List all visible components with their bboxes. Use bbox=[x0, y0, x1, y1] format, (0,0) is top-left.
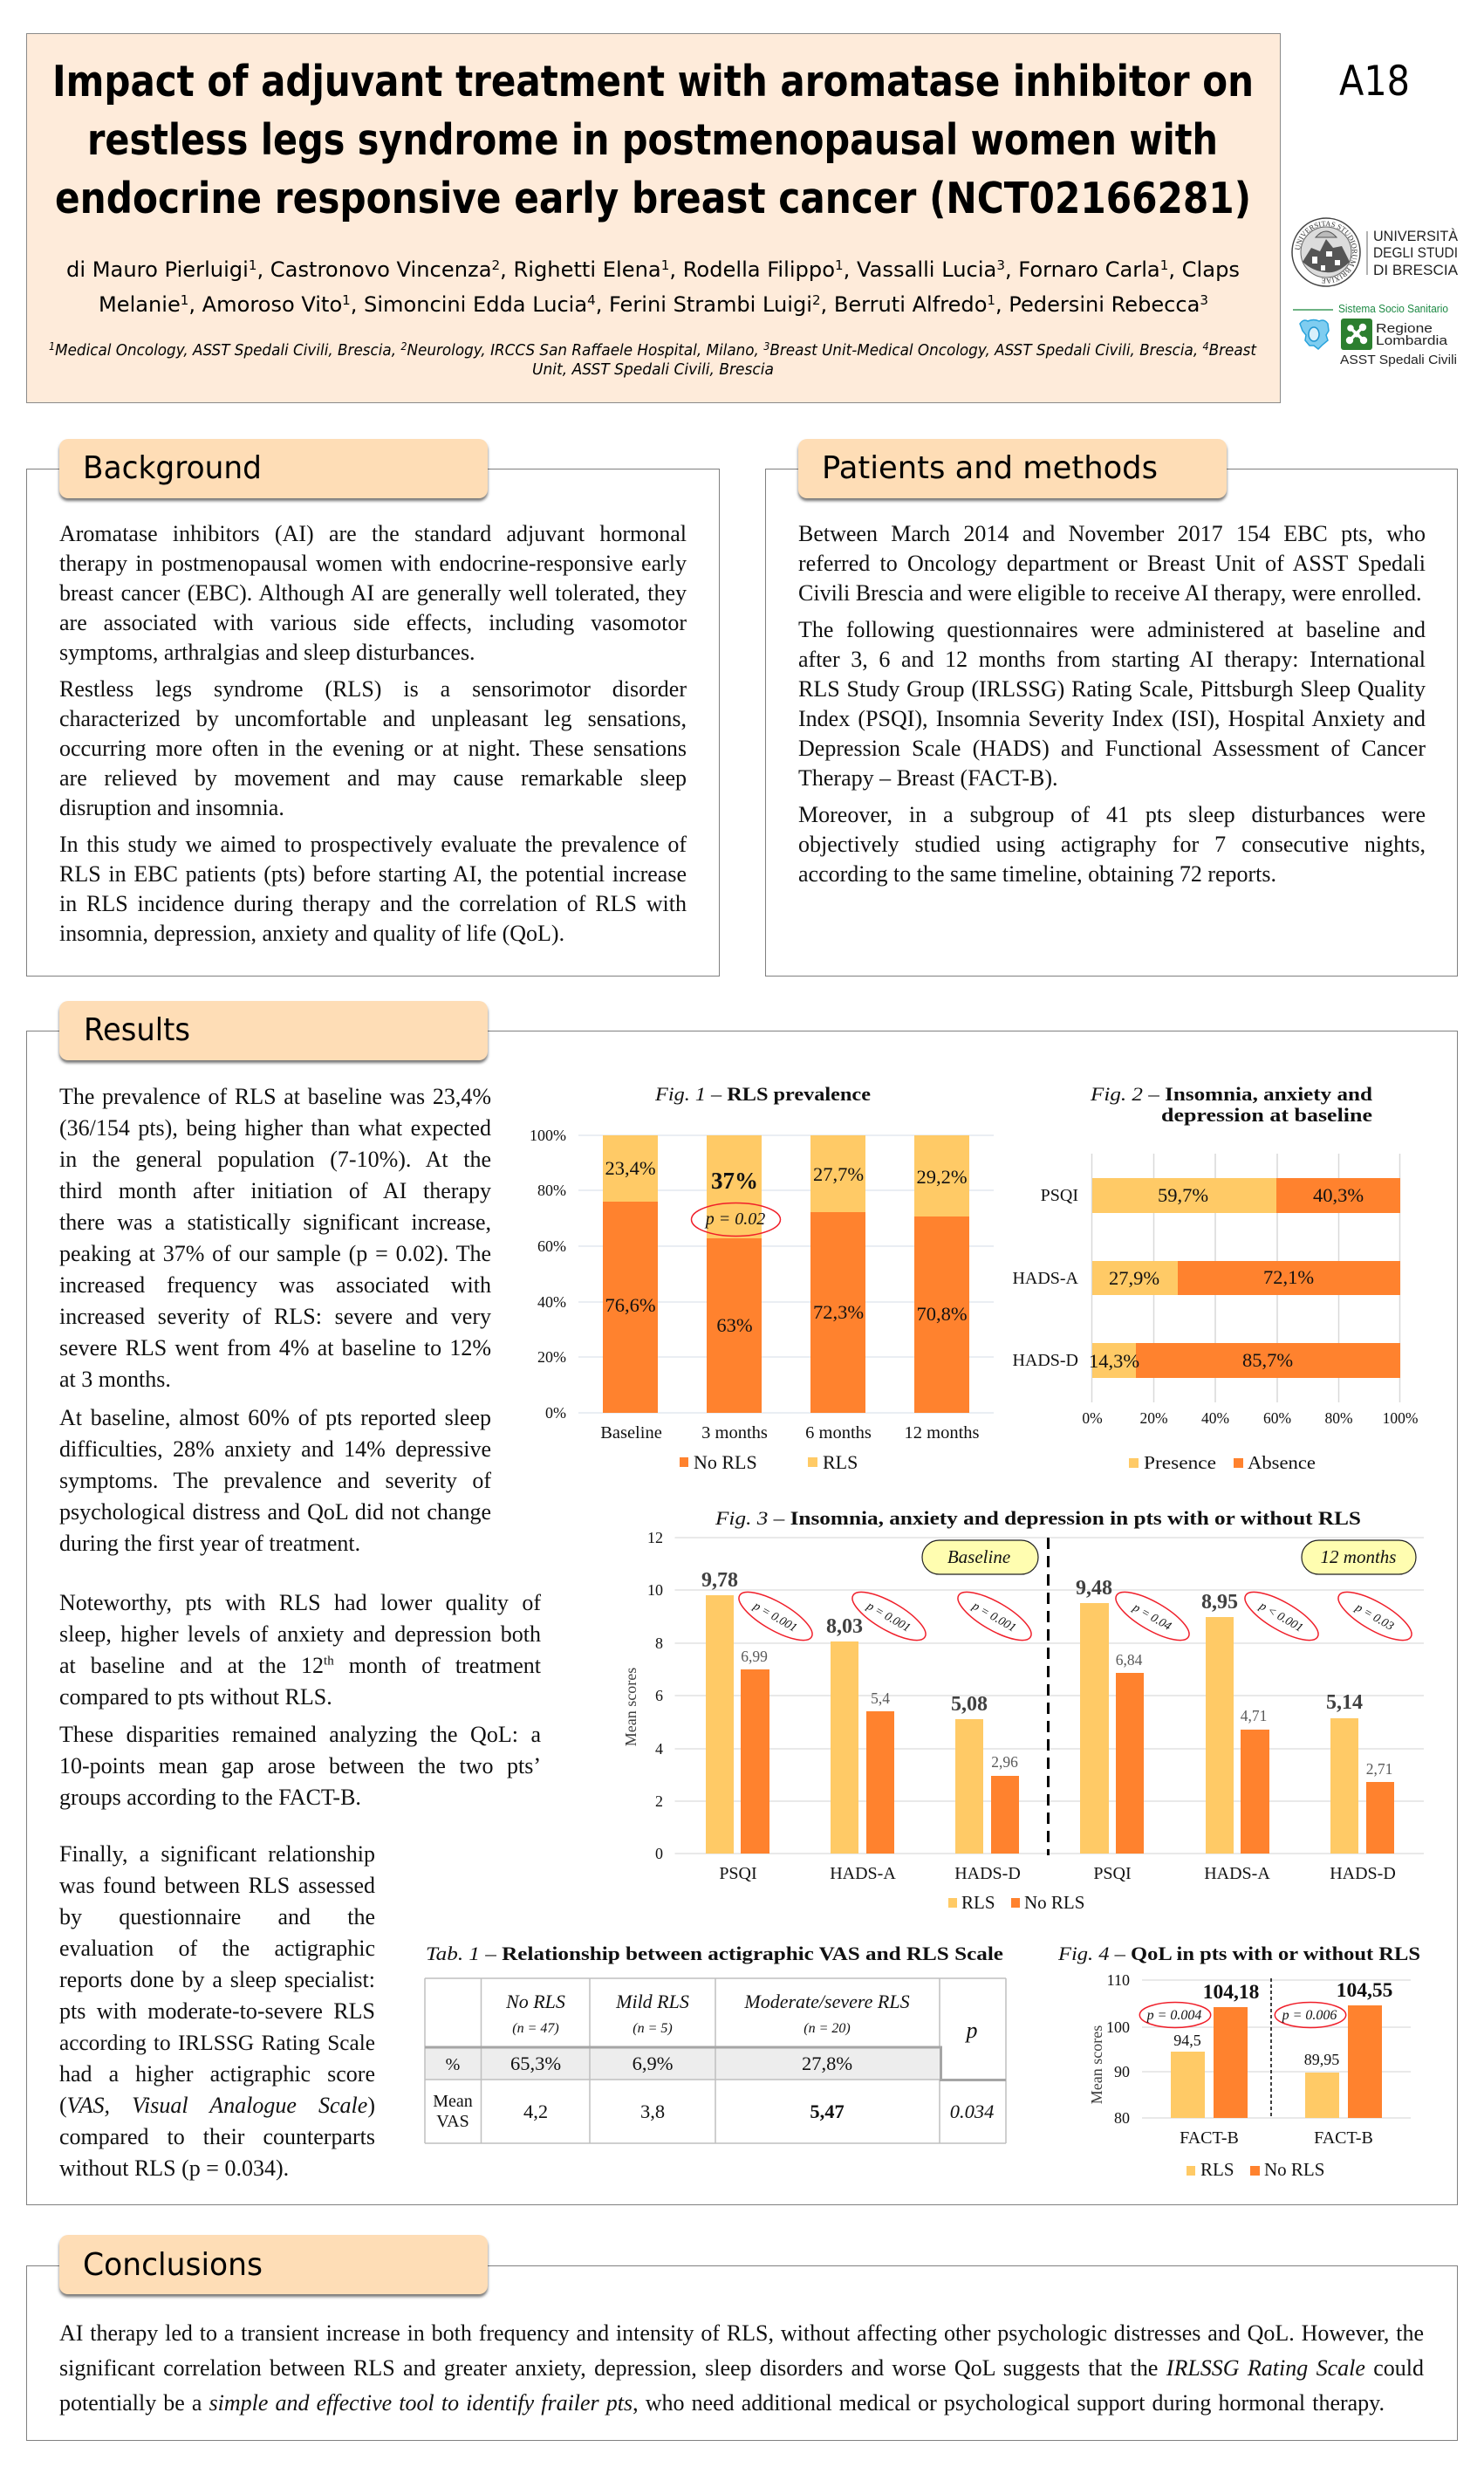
text: results paragraph 3: Noteworthy, pts with RLS had lower quality of bbox=[59, 1590, 541, 1615]
y axis labels: 8 bbox=[655, 1634, 663, 1652]
chart title: depression at baseline bbox=[1161, 1104, 1372, 1126]
authors: , Amoroso Vito bbox=[188, 291, 342, 316]
logo: Regione Lombardia ASST Spedali Civili: Sistema Socio Sanitario bbox=[1338, 302, 1448, 315]
university name bbox=[1373, 228, 1459, 278]
text: results paragraph 5: was found between RLS assessed bbox=[59, 1873, 375, 1898]
authors: 1 bbox=[248, 257, 256, 272]
text: results paragraph 2: psychological distress and QoL did not change bbox=[59, 1499, 491, 1525]
data labels: 23,4% bbox=[605, 1157, 656, 1179]
text: background paragraph 3: In this study we aimed to prospectively evaluate the prevalence of bbox=[59, 832, 687, 857]
y axis labels: 80% bbox=[537, 1182, 566, 1199]
text: results paragraph 4: These disparities remained analyzing the QoL: a bbox=[59, 1722, 541, 1747]
text: results paragraph 1 bbox=[59, 1084, 491, 1392]
text: background paragraph 3: in RLS incidence during therapy and the correlation of RLS with bbox=[59, 891, 687, 916]
row: mean VAS: 4,2 bbox=[523, 2101, 548, 2122]
row: percent: 65,3% bbox=[510, 2053, 561, 2074]
text: methods paragraph 1 bbox=[798, 521, 1426, 606]
authors bbox=[66, 257, 1239, 316]
text: results paragraph 2: difficulties, 28% anxiety and 14% depressive bbox=[59, 1436, 491, 1462]
heading: results bbox=[59, 1001, 488, 1060]
legend: No RLS bbox=[1024, 1892, 1084, 1913]
bars bbox=[1171, 2005, 1382, 2118]
logo: Regione Lombardia ASST Spedali Civili: Lombardia bbox=[1376, 333, 1448, 348]
chart: Fig. 2 insomnia, anxiety and depression at baseline bbox=[1012, 1083, 1418, 1473]
row: percent: 6,9% bbox=[633, 2053, 673, 2074]
authors: 3 bbox=[1200, 291, 1207, 307]
authors: , Ferini Strambi Luigi bbox=[595, 291, 811, 316]
authors: 2 bbox=[811, 291, 820, 307]
data labels: 14,3% bbox=[1089, 1350, 1139, 1372]
text: results paragraph 1: severe RLS went from 4% at baseline to 12% bbox=[59, 1335, 491, 1360]
text: background paragraph 3: insomnia, depression, anxiety and quality of life (QoL). bbox=[59, 921, 564, 946]
text: background paragraph 2: are relieved by movement and may cause remarkable sleep bbox=[59, 765, 687, 791]
y axis title: Mean scores bbox=[1088, 2025, 1105, 2104]
panel: background bbox=[26, 439, 720, 977]
row: mean VAS: 3,8 bbox=[640, 2101, 665, 2122]
legend: RLS bbox=[823, 1451, 858, 1473]
category labels bbox=[600, 1423, 980, 1443]
text: results paragraph 5: by questionnaire and the bbox=[59, 1904, 375, 1929]
text: results paragraph 5: compared to their counterparts bbox=[59, 2124, 375, 2149]
category labels: Baseline bbox=[600, 1423, 662, 1443]
chart title: Fig. 1 – RLS prevalence bbox=[654, 1083, 871, 1105]
table header: (n = 5) bbox=[633, 2021, 673, 2036]
row: mean VAS: 0.034 bbox=[950, 2101, 994, 2122]
data labels: 76,6% bbox=[605, 1294, 656, 1316]
table title: Tab. 1 – Relationship between actigraphic VAS and RLS Scale bbox=[426, 1943, 1003, 1964]
data labels: RLS: 5,08 bbox=[951, 1693, 988, 1716]
logo: Università degli Studi di Brescia bbox=[1291, 217, 1459, 287]
affiliations: Unit, ASST Spedali Civili, Brescia bbox=[532, 360, 773, 379]
legend: RLS bbox=[1200, 2159, 1234, 2180]
authors: 1 bbox=[1159, 257, 1168, 272]
data labels: no RLS: 6,99 bbox=[741, 1648, 768, 1665]
text: methods paragraph 2: Therapy – Breast (FACT-B). bbox=[798, 765, 1058, 791]
data labels: 29,2% bbox=[916, 1166, 968, 1188]
data labels: 37% bbox=[711, 1168, 758, 1194]
authors: 1 bbox=[987, 291, 995, 307]
category labels: PSQI bbox=[1041, 1186, 1078, 1205]
category labels bbox=[719, 1864, 1396, 1883]
row: mean VAS bbox=[433, 2092, 994, 2131]
y axis labels: 4 bbox=[655, 1740, 663, 1758]
text: methods paragraph 1: Civili Brescia and were eligible to receive AI therapy, were enrolled. bbox=[798, 580, 1421, 606]
data labels: no RLS: 2,71 bbox=[1366, 1760, 1392, 1778]
chart title: Fig. 2 – Insomnia, anxiety and bbox=[1090, 1083, 1372, 1105]
authors: Melanie bbox=[98, 291, 180, 316]
x axis labels: 40% bbox=[1201, 1409, 1229, 1427]
text: results paragraph 1: The prevalence of RLS at baseline was 23,4% bbox=[59, 1084, 491, 1109]
data labels bbox=[1173, 1979, 1392, 2068]
heading: results: Results bbox=[84, 1012, 190, 1048]
y axis labels: 110 bbox=[1107, 1971, 1130, 1989]
authors: di Mauro Pierluigi bbox=[66, 257, 247, 281]
category labels: HADS-A bbox=[1012, 1269, 1079, 1288]
y axis labels: 6 bbox=[655, 1687, 663, 1704]
text: results paragraph 3: sleep, higher levels of anxiety and depression both bbox=[59, 1621, 541, 1647]
chart title: Fig. 3 – Insomnia, anxiety and depression in pts with or without RLS bbox=[715, 1507, 1361, 1529]
p value callouts bbox=[733, 1583, 1418, 1649]
university name: UNIVERSITÀ bbox=[1373, 228, 1459, 244]
university name: DI BRESCIA bbox=[1373, 262, 1459, 278]
row: percent: % bbox=[446, 2055, 460, 2074]
text: methods paragraph 3: Moreover, in a subgroup of 41 pts sleep disturbances were bbox=[798, 802, 1426, 827]
data labels bbox=[605, 1157, 968, 1336]
category labels: HADS-D bbox=[954, 1864, 1021, 1883]
p value callouts: p = 0.001 bbox=[969, 1600, 1018, 1635]
text: results paragraph 5: reports done by a sleep specialist: bbox=[59, 1967, 375, 1992]
table header: (n = 20) bbox=[804, 2021, 851, 2036]
text: results paragraph 4 bbox=[59, 1722, 541, 1810]
y axis labels: 12 bbox=[647, 1529, 663, 1546]
text: conclusions: AI therapy led to a transient increase in both frequency and intensity of RLS, without affecting other psychologic distresses and QoL. However, the bbox=[59, 2320, 1424, 2346]
category labels: FACT-B bbox=[1180, 2128, 1239, 2148]
bars: baseline bbox=[706, 1595, 1019, 1854]
header banner bbox=[26, 33, 1281, 403]
text: results paragraph 3: compared to pts without RLS. bbox=[59, 1684, 332, 1710]
y axis labels: 0 bbox=[655, 1845, 663, 1862]
text: background paragraph 1: are associated with various side effects, including vasomotor bbox=[59, 610, 687, 635]
text: results paragraph 5: according to IRLSSG Rating Scale bbox=[59, 2031, 375, 2055]
authors: , Rodella Filippo bbox=[669, 257, 835, 281]
text: results paragraph 1: (36/154 pts), being higher than what expected bbox=[59, 1115, 491, 1141]
table header: Moderate/severe RLS bbox=[743, 1991, 910, 2012]
text: results paragraph 4: groups according to the FACT-B. bbox=[59, 1785, 361, 1810]
category labels: HADS-D bbox=[1012, 1351, 1078, 1370]
authors: , Claps bbox=[1168, 257, 1239, 281]
p value callouts: p = 0.006 bbox=[1282, 2008, 1337, 2023]
heading: background: Background bbox=[83, 450, 262, 486]
affiliations: 1 bbox=[49, 340, 55, 353]
row: mean VAS: 5,47 bbox=[810, 2101, 845, 2122]
text: results paragraph 5: evaluation of the actigraphic bbox=[59, 1936, 375, 1961]
category labels bbox=[1180, 2128, 1373, 2148]
data labels: 27,7% bbox=[813, 1163, 864, 1185]
data labels: 85,7% bbox=[1242, 1349, 1293, 1371]
chart: Fig. 4 QoL in pts with or without RLS bbox=[1057, 1943, 1420, 2180]
text: results paragraph 2: At baseline, almost 60% of pts reported sleep bbox=[59, 1405, 491, 1430]
legend: No RLS bbox=[1264, 2159, 1324, 2180]
data labels: 94,5 bbox=[1173, 2032, 1201, 2049]
text: methods paragraph 3: objectively studied using actigraphy for 7 consecutive nights, bbox=[798, 832, 1426, 857]
text: conclusions: significant correlation between RLS and greater anxiety, depression, sleep disorders and worse QoL suggests that the IRLSSG Rating Scale could bbox=[59, 2355, 1424, 2381]
category labels: HADS-A bbox=[1204, 1864, 1270, 1883]
y axis labels bbox=[530, 1127, 566, 1422]
title: Impact of adjuvant treatment with aromatase inhibitor on bbox=[52, 56, 1253, 106]
data labels: 104,55 bbox=[1337, 1979, 1392, 2002]
affiliations: 4 bbox=[1202, 340, 1208, 353]
data labels: 104,18 bbox=[1203, 1981, 1259, 2004]
text: methods paragraph 3 bbox=[798, 802, 1426, 887]
text: results paragraph 5: Finally, a significant relationship bbox=[59, 1841, 375, 1867]
data labels: RLS: 9,48 bbox=[1076, 1577, 1112, 1600]
affiliations: Neurology, IRCCS San Raffaele Hospital, Milano, bbox=[407, 340, 763, 360]
row: percent bbox=[446, 2053, 852, 2074]
text: results paragraph 2 bbox=[59, 1405, 492, 1556]
table header: Mild RLS bbox=[615, 1991, 689, 2012]
data labels: no RLS bbox=[741, 1648, 1392, 1778]
row: percent: 27,8% bbox=[802, 2053, 852, 2074]
text: results paragraph 1: third month after initiation of AI therapy bbox=[59, 1178, 491, 1203]
x axis labels: 20% bbox=[1139, 1409, 1168, 1427]
authors: 1 bbox=[180, 291, 188, 307]
y axis labels: 20% bbox=[537, 1348, 566, 1366]
text: background paragraph 3 bbox=[59, 832, 687, 946]
authors: , Vassalli Lucia bbox=[843, 257, 996, 281]
y axis labels: 100% bbox=[530, 1127, 566, 1144]
poster code A18: A18 bbox=[1339, 58, 1410, 106]
category labels: HADS-A bbox=[830, 1864, 896, 1883]
legend bbox=[680, 1451, 858, 1473]
text: background paragraph 1: Aromatase inhibitors (AI) are the standard adjuvant hormonal bbox=[59, 521, 687, 546]
affiliations: Medical Oncology, ASST Spedali Civili, Brescia, bbox=[55, 340, 400, 360]
data labels: 70,8% bbox=[916, 1303, 968, 1325]
heading: patients and methods bbox=[798, 439, 1227, 498]
text: background paragraph 2: disruption and insomnia. bbox=[59, 795, 284, 820]
x axis labels: 60% bbox=[1263, 1409, 1291, 1427]
x axis labels bbox=[1082, 1409, 1418, 1427]
data labels: 40,3% bbox=[1313, 1184, 1364, 1206]
data labels: no RLS: 6,84 bbox=[1116, 1651, 1143, 1669]
text: methods paragraph 2: after 3, 6 and 12 months from starting AI therapy: International bbox=[798, 647, 1426, 672]
p value callouts: p = 0.004 bbox=[1146, 2008, 1201, 2023]
logo: Regione Lombardia ASST Spedali Civili: Regione bbox=[1376, 321, 1433, 336]
data labels: RLS: 8,03 bbox=[826, 1615, 863, 1638]
text: results paragraph 5: pts with moderate-to-severe RLS bbox=[59, 1998, 375, 2024]
data labels: 72,1% bbox=[1263, 1266, 1314, 1288]
pill: 12 months bbox=[1302, 1540, 1416, 1574]
p value callouts: p < 0.001 bbox=[1256, 1600, 1305, 1635]
text: results paragraph 3 bbox=[59, 1590, 541, 1710]
data labels: 27,9% bbox=[1109, 1267, 1159, 1289]
text: results paragraph 4: 10-points mean gap arose between the two pts’ bbox=[59, 1753, 541, 1778]
data labels: no RLS: 2,96 bbox=[991, 1753, 1018, 1771]
category labels: HADS-D bbox=[1330, 1864, 1396, 1883]
data labels: RLS: 5,14 bbox=[1326, 1691, 1363, 1714]
y axis title: Mean scores bbox=[622, 1668, 639, 1746]
text: methods paragraph 3: according to the same timeline, obtaining 72 reports. bbox=[798, 861, 1276, 887]
text: methods paragraph 2: RLS Study Group (IRLSSG) Rating Scale, Pittsburgh Sleep Quality bbox=[798, 676, 1426, 702]
text: results paragraph 1: increased severity of RLS: severe and very bbox=[59, 1304, 491, 1329]
row: mean VAS: VAS bbox=[436, 2112, 469, 2131]
y axis labels: 80 bbox=[1114, 2109, 1130, 2127]
category labels: PSQI bbox=[1093, 1864, 1132, 1883]
heading: patients and methods: Patients and methods bbox=[822, 450, 1158, 486]
authors: 1 bbox=[835, 257, 843, 272]
heading: conclusions bbox=[59, 2235, 488, 2294]
affiliations: 2 bbox=[400, 340, 407, 353]
text: results paragraph 1: at 3 months. bbox=[59, 1367, 171, 1392]
p value callouts: p = 0.001 bbox=[864, 1600, 913, 1635]
text: results paragraph 5 bbox=[59, 1841, 375, 2181]
legend: Presence bbox=[1144, 1452, 1216, 1473]
chart: Fig. 3 insomnia, anxiety and depression in pts with or without RLS bbox=[622, 1507, 1424, 1913]
data labels: 59,7% bbox=[1158, 1184, 1208, 1206]
pill: baseline bbox=[922, 1540, 1038, 1574]
authors: 1 bbox=[660, 257, 669, 272]
text: background paragraph 2: characterized by uncomfortable and unpleasant leg sensations, bbox=[59, 706, 687, 731]
text: background paragraph 3: RLS in EBC patients (pts) before starting AI, the potential increase bbox=[59, 861, 687, 887]
text: results paragraph 1: in the general population (7-10%). At the bbox=[59, 1147, 491, 1172]
pill: 12 months: 12 months bbox=[1321, 1546, 1396, 1567]
text: background paragraph 1: breast cancer (EBC). Although AI are generally well tolerated, they bbox=[59, 580, 687, 606]
title: endocrine responsive early breast cancer (NCT02166281) bbox=[54, 173, 1251, 223]
table header: (n = 47) bbox=[512, 2021, 559, 2036]
authors: , Castronovo Vincenza bbox=[256, 257, 491, 281]
data labels: no RLS: 4,71 bbox=[1241, 1707, 1267, 1724]
data labels bbox=[1089, 1184, 1364, 1372]
chart title: Fig. 4 – QoL in pts with or without RLS bbox=[1057, 1943, 1420, 1964]
icon: university seal: UNIVERSITAS STUDIORUM BRIXIAE bbox=[1295, 221, 1357, 284]
text: results paragraph 5: (VAS, Visual Analogue Scale) bbox=[59, 2093, 375, 2118]
category labels: PSQI bbox=[719, 1864, 757, 1883]
legend: RLS bbox=[961, 1892, 995, 1913]
data labels: 72,3% bbox=[813, 1301, 864, 1323]
table header bbox=[505, 1991, 977, 2043]
bars: 12 months bbox=[1080, 1603, 1394, 1854]
text: conclusions bbox=[59, 2320, 1424, 2416]
y axis labels: 90 bbox=[1114, 2063, 1130, 2080]
category labels bbox=[1012, 1186, 1079, 1370]
title bbox=[52, 56, 1253, 223]
legend bbox=[948, 1892, 1084, 1913]
affiliations: 3 bbox=[763, 340, 769, 353]
p value callouts: p = 0.04 bbox=[1130, 1600, 1173, 1634]
table header: No RLS bbox=[505, 1991, 565, 2012]
text: methods paragraph 2: The following questionnaires were administered at baseline and bbox=[798, 617, 1426, 642]
text: methods paragraph 2 bbox=[798, 617, 1426, 791]
heading: background bbox=[59, 439, 488, 498]
data labels: RLS: 8,95 bbox=[1201, 1591, 1238, 1614]
legend bbox=[1129, 1452, 1316, 1473]
text: background paragraph 2: Restless legs syndrome (RLS) is a sensorimotor disorder bbox=[59, 676, 687, 702]
table: Tab. 1 relationship between actigraphic VAS and RLS Scale bbox=[424, 1943, 1007, 2144]
category labels: 6 months bbox=[805, 1423, 872, 1443]
heading: conclusions: Conclusions bbox=[83, 2247, 263, 2283]
text: methods paragraph 2: Index (PSQI), Insomnia Severity Index (ISI), Hospital Anxiety and bbox=[798, 706, 1426, 731]
text: conclusions: potentially be a simple and effective tool to identify frailer pts, who need additional medical or psychological support during hormonal therapy. bbox=[59, 2390, 1385, 2416]
authors: , Righetti Elena bbox=[500, 257, 660, 281]
data labels: no RLS: 5,4 bbox=[871, 1689, 890, 1707]
panel: patients and methods bbox=[765, 439, 1458, 977]
legend bbox=[1187, 2159, 1324, 2180]
authors: , Simoncini Edda Lucia bbox=[350, 291, 587, 316]
text: results paragraph 2: during the first year of treatment. bbox=[59, 1531, 360, 1556]
x axis labels: 0% bbox=[1082, 1409, 1103, 1427]
data labels: 63% bbox=[716, 1314, 753, 1336]
p value callouts: p = 0.03 bbox=[1352, 1600, 1396, 1634]
x axis labels: 100% bbox=[1383, 1409, 1418, 1427]
authors: 3 bbox=[996, 257, 1004, 272]
university name: DEGLI STUDI bbox=[1373, 244, 1458, 261]
p value callout: p = 0.02 bbox=[704, 1210, 765, 1229]
text: results paragraph 3: at baseline and at the 12th month of treatment bbox=[59, 1653, 541, 1678]
p value callouts bbox=[1139, 2002, 1346, 2028]
y axis labels: 40% bbox=[537, 1293, 566, 1311]
affiliations: Breast Unit-Medical Oncology, ASST Spedali Civili, Brescia, bbox=[769, 340, 1202, 360]
data labels: RLS: 9,78 bbox=[701, 1569, 738, 1592]
text: methods paragraph 1: Between March 2014 and November 2017 154 EBC pts, who bbox=[798, 521, 1426, 546]
stacked horizontal bars bbox=[1092, 1178, 1400, 1378]
y axis labels: 2 bbox=[655, 1792, 663, 1810]
legend: No RLS bbox=[694, 1451, 757, 1473]
authors: , Fornaro Carla bbox=[1004, 257, 1159, 281]
text: background paragraph 2 bbox=[59, 676, 687, 820]
text: results paragraph 5: had a higher actigraphic score bbox=[59, 2061, 375, 2087]
text: results paragraph 5: without RLS (p = 0.034). bbox=[59, 2155, 289, 2181]
data labels: RLS bbox=[701, 1569, 1363, 1716]
panel: conclusions bbox=[26, 2235, 1458, 2441]
y axis labels bbox=[647, 1529, 663, 1862]
authors: , Pedersini Rebecca bbox=[995, 291, 1200, 316]
text: results paragraph 1: peaking at 37% of our sample (p = 0.02). The bbox=[59, 1241, 491, 1266]
authors: 4 bbox=[587, 291, 595, 307]
authors: 2 bbox=[491, 257, 500, 272]
text: results paragraph 1: increased frequency was associated with bbox=[59, 1272, 491, 1298]
text: background paragraph 1 bbox=[59, 521, 687, 665]
title: restless legs syndrome in postmenopausal women with bbox=[87, 115, 1218, 164]
p value callout bbox=[691, 1203, 780, 1236]
y axis labels bbox=[1106, 1971, 1130, 2127]
pill: baseline: Baseline bbox=[947, 1546, 1010, 1567]
category labels: 3 months bbox=[701, 1423, 768, 1443]
text: results paragraph 1: there was a statistically significant increase, bbox=[59, 1210, 491, 1235]
icon: blue crest bbox=[1300, 319, 1329, 349]
stacked bars bbox=[603, 1135, 969, 1413]
authors: 1 bbox=[342, 291, 350, 307]
category labels: FACT-B bbox=[1314, 2128, 1373, 2148]
text: background paragraph 1: symptoms, arthralgias and sleep disturbances. bbox=[59, 640, 475, 665]
category labels: 12 months bbox=[904, 1423, 980, 1443]
x axis labels: 80% bbox=[1324, 1409, 1353, 1427]
logo: Regione Lombardia ASST Spedali Civili bbox=[1293, 302, 1457, 367]
chart: Fig. 1 RLS prevalence bbox=[530, 1083, 994, 1473]
table header: p bbox=[965, 2018, 977, 2043]
icon: Regione Lombardia green square bbox=[1341, 319, 1372, 350]
text: methods paragraph 1: referred to Oncology department or Breast Unit of ASST Spedali bbox=[798, 551, 1426, 576]
data labels: 89,95 bbox=[1304, 2051, 1339, 2068]
affiliations: Breast bbox=[1208, 340, 1256, 360]
y axis labels: 60% bbox=[537, 1237, 566, 1255]
authors: , Berruti Alfredo bbox=[820, 291, 987, 316]
legend: Absence bbox=[1248, 1452, 1316, 1473]
text: background paragraph 1: therapy in postmenopausal women with endocrine-responsive early bbox=[59, 551, 687, 576]
y axis labels: 10 bbox=[647, 1581, 663, 1599]
chart title bbox=[1090, 1083, 1372, 1126]
y axis labels: 100 bbox=[1106, 2018, 1130, 2036]
affiliations bbox=[49, 340, 1256, 379]
text: methods paragraph 2: Depression Scale (HADS) and Functional Assessment of Cancer bbox=[798, 736, 1426, 761]
row: mean VAS: Mean bbox=[433, 2092, 473, 2111]
text: background paragraph 2: occurring more often in the evening or at night. These sensations bbox=[59, 736, 687, 761]
logo: Regione Lombardia ASST Spedali Civili: ASST Spedali Civili bbox=[1340, 353, 1457, 367]
text: results paragraph 2: symptoms. The prevalence and severity of bbox=[59, 1468, 491, 1493]
y axis labels: 0% bbox=[545, 1404, 566, 1422]
panel: results bbox=[26, 1001, 1458, 2205]
p value callouts: p = 0.001 bbox=[750, 1600, 799, 1635]
